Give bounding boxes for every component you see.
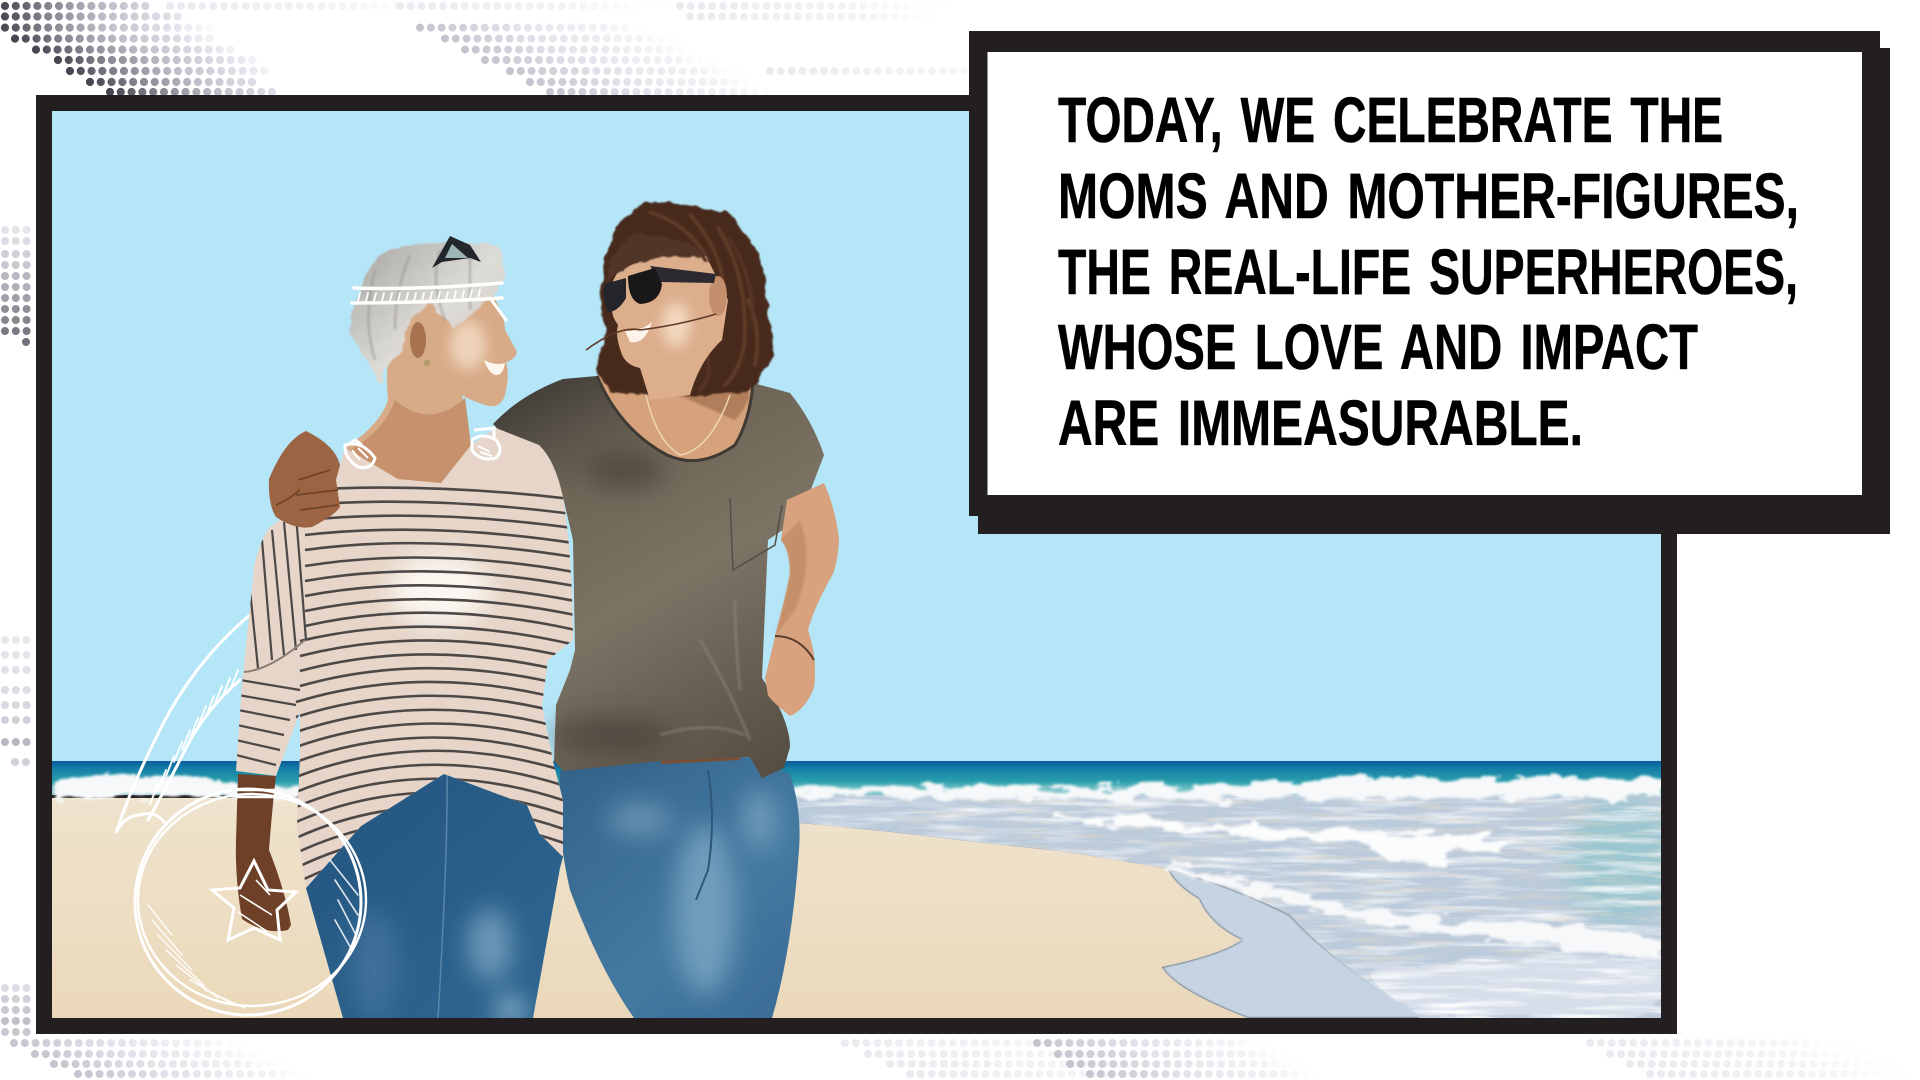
woman left: neck and face (345, 290, 517, 483)
tee pocket (730, 498, 782, 570)
photo frame (36, 95, 1677, 1034)
woman left: hair (352, 243, 506, 385)
foam band (52, 773, 1661, 800)
shallow water (780, 795, 1661, 1018)
hand on shoulder (269, 431, 340, 528)
woman right: face (611, 253, 728, 400)
doodle: headband (352, 283, 506, 320)
woman left: arm and hand (236, 774, 291, 931)
halftone dots: left column (5, 230, 30, 1032)
headline text: WHOSE LOVE AND IMPACT (1058, 311, 1698, 383)
cheek highlight (450, 321, 486, 369)
necklace (645, 390, 730, 455)
tee folds (550, 450, 670, 753)
smile right (625, 322, 652, 342)
jeans seam (438, 775, 447, 1018)
sea (52, 761, 1661, 795)
lens highlight (445, 244, 468, 258)
sleeve fold (244, 640, 305, 672)
sunglasses on head (432, 236, 481, 268)
tee (493, 376, 824, 778)
headline text: ARE IMMEASURABLE. (1058, 387, 1583, 459)
foam speckle (1370, 955, 1661, 1018)
smile left (484, 360, 505, 375)
woman right: hair (592, 200, 775, 396)
woman right: legs and jeans (559, 757, 800, 1018)
neck shade (350, 398, 471, 483)
teal shallows (1565, 795, 1675, 925)
sand (52, 798, 1248, 1018)
photo: two women on a beach (52, 111, 1675, 1026)
ear (410, 322, 426, 358)
hair highlights (650, 212, 757, 390)
jeans fly right (696, 770, 712, 900)
bracelet (775, 636, 814, 660)
doodle: collar (345, 428, 500, 468)
neck shadow (680, 390, 752, 420)
doodle: swoosh behind figure (116, 614, 251, 833)
foam wave 2 (1055, 812, 1530, 868)
shirt sun patch (390, 555, 490, 625)
headline text (1058, 84, 1799, 459)
wet sand (1162, 869, 1425, 1018)
tee wrinkles (660, 600, 750, 740)
halftone dots: top middle (170, 6, 970, 92)
hair strands (368, 250, 470, 360)
jeans highlights left (351, 909, 524, 1026)
fingers (276, 470, 338, 510)
earring (424, 360, 430, 366)
face highlight (662, 303, 690, 347)
doodle: star (212, 861, 296, 940)
foam wave 3 (1168, 866, 1661, 962)
belt (661, 757, 740, 764)
chest skin (597, 374, 751, 460)
halftone dots: bottom band (14, 1043, 1910, 1074)
text box shadow (978, 48, 1890, 534)
sky (52, 111, 1661, 771)
woman left: jeans (306, 774, 563, 1018)
foam shore (1370, 956, 1661, 1018)
doodle band on arm (236, 790, 276, 797)
text box (988, 52, 1862, 495)
jeans highlights right (608, 790, 778, 995)
text box frame (969, 31, 1880, 516)
water texture (780, 798, 1661, 1018)
shirt stripes (236, 488, 580, 898)
woman left: shirt (236, 428, 573, 888)
hair strand (586, 314, 716, 350)
sunglasses right (604, 266, 716, 312)
tee collar (597, 376, 753, 461)
hair fringe (608, 235, 712, 282)
halftone dots: top left (5, 6, 280, 92)
arm shade (775, 520, 806, 636)
woman right: arm and hand (765, 483, 839, 716)
doodle: medallion circle (135, 789, 366, 1015)
ear (709, 276, 727, 316)
